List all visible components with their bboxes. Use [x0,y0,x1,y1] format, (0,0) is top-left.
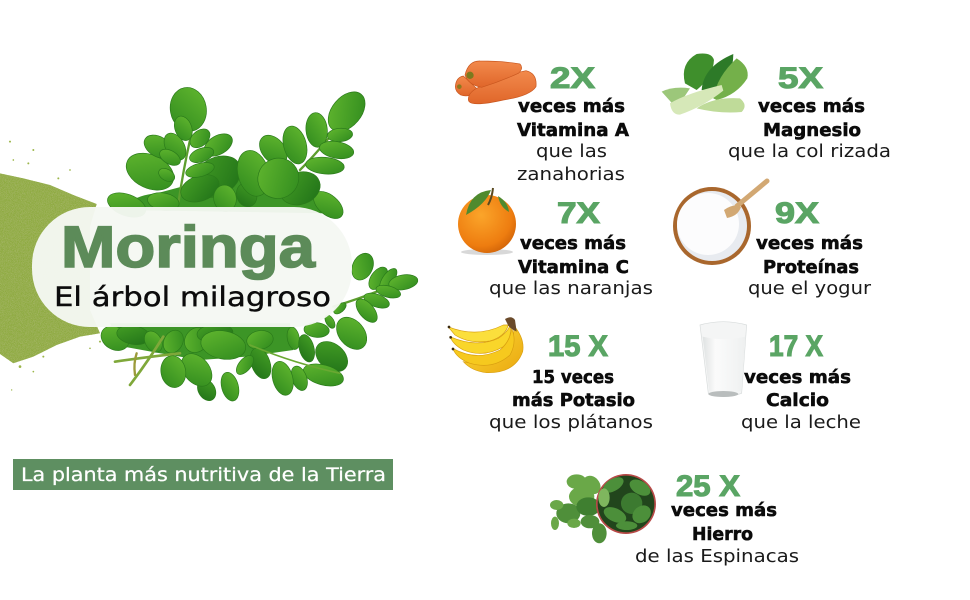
text: protein description: Proteínas [763,258,859,278]
subtitle: El árbol milagroso: El árbol milagroso [54,282,331,313]
icon: bok choy [662,53,748,115]
text: magnesium description: que la col rizada [728,141,891,162]
icon: glass of milk [700,322,747,397]
icon: bananas [448,317,523,373]
multiplier: 2X: 2X [550,62,595,95]
multiplier: 15 X: 15 X [548,330,608,363]
multiplier: 5X: 5X [778,62,823,95]
text: protein description: veces más [756,234,863,254]
text: vitamin C description [489,234,653,299]
text: vitamin A description: Vitamina A [517,121,629,141]
stat: vitamin A carrots [455,61,629,185]
text: calcium description: veces más [744,368,851,388]
stat: potassium bananas [448,317,653,433]
text: protein description [748,234,872,299]
illustration: moringa leaves [97,85,419,404]
multiplier: 9X: 9X [775,197,819,230]
title pill panel [32,207,352,327]
text: vitamin A description: zanahorias [517,164,625,185]
icon: yogurt bowl with spoon [673,181,767,265]
tagline band [13,459,393,490]
text: calcium description: Calcio [766,391,829,411]
stat: iron spinach [550,470,799,567]
icon: spinach leaves and bowl [550,472,656,543]
text: protein description: que el yogur [748,278,872,299]
stat: calcium milk [700,322,861,433]
text: magnesium description [728,97,891,162]
text: potassium description: que los plátanos [489,412,653,433]
text: iron description [635,501,799,567]
text: vitamin C description: que las naranjas [489,278,653,299]
text: vitamin C description: Vitamina C [518,258,629,278]
tagline band: La planta más nutritiva de la Tierra [21,464,386,486]
multiplier: 25 X: 25 X [676,470,740,503]
text: calcium description [741,368,861,433]
multiplier: 7X: 7X [557,197,600,230]
stat: protein yogurt [673,181,872,299]
multiplier: 17 X: 17 X [769,330,823,363]
heading: Moringa: Moringa [61,215,316,280]
icon: orange [458,188,516,255]
text: vitamin A description [517,97,629,185]
text: iron description: veces más [671,501,777,521]
text: potassium description [489,368,653,433]
text: potassium description: más Potasio [512,391,635,411]
text: vitamin A description: veces más [518,97,625,117]
text: vitamin C description: veces más [520,234,626,254]
text: calcium description: que la leche [741,412,861,433]
text: magnesium description: veces más [758,97,865,117]
text: potassium description: 15 veces [532,368,614,388]
text: iron description: Hierro [692,525,753,545]
illustration: moringa powder [0,141,101,391]
text: magnesium description: Magnesio [763,121,861,141]
text: vitamin A description: que las [536,141,607,162]
stat: vitamin C orange [458,188,653,299]
stat: magnesium kale [662,53,891,162]
icon: carrots [455,61,536,104]
text: iron description: de las Espinacas [635,546,799,567]
